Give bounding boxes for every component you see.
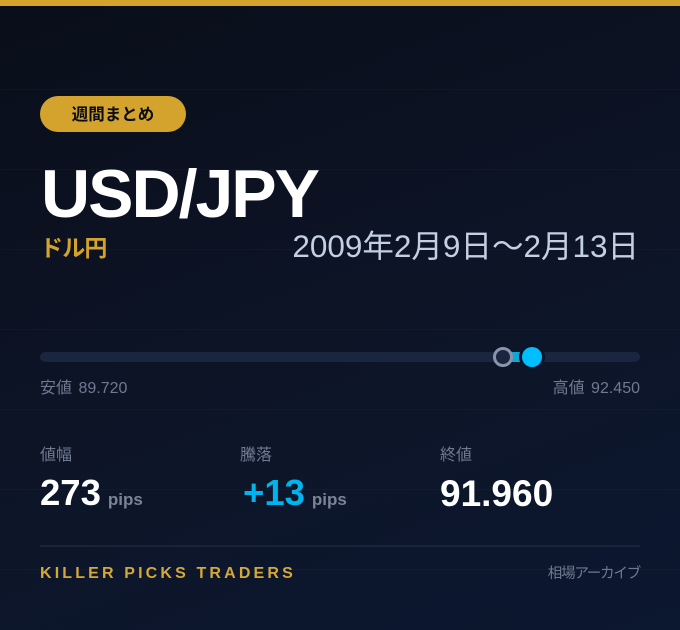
range track xyxy=(40,352,640,362)
close price marker xyxy=(522,347,542,367)
range bar chart xyxy=(40,347,640,367)
archive label: 相場アーカイブ xyxy=(548,566,640,582)
top accent bar xyxy=(0,0,680,6)
stat: range xyxy=(40,446,143,513)
open to close segment xyxy=(503,352,533,362)
stat: change xyxy=(240,446,347,513)
open price marker xyxy=(493,347,513,367)
date range: 2009年2月9日～2月13日 xyxy=(292,228,639,264)
stat: close xyxy=(440,446,553,514)
stat label: 騰落 xyxy=(240,447,272,464)
low price label: 安値 89.720 xyxy=(40,380,127,397)
brand name: KILLER PICKS TRADERS xyxy=(40,565,296,582)
stat value: +13 pips xyxy=(243,472,347,513)
high price label: 高値 92.450 xyxy=(553,380,640,397)
stat value: 91.960 xyxy=(440,473,553,514)
badge: weekly summary xyxy=(40,96,186,132)
subtitle: dollar yen: ドル円 xyxy=(40,229,107,263)
stat value: 273 pips xyxy=(40,472,143,513)
title: currency pair: USD/JPY xyxy=(41,156,318,232)
badge: weekly summary: 週間まとめ xyxy=(72,101,154,125)
stat label: 終値 xyxy=(440,447,472,464)
stat label: 値幅 xyxy=(40,447,72,464)
